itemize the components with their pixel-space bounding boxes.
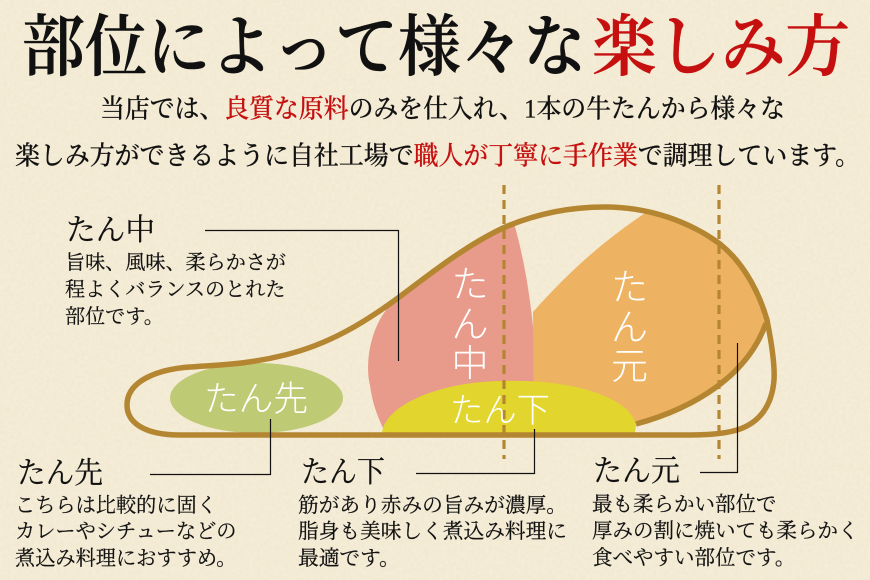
region: tan-saki (green) [170, 363, 343, 433]
callout: tan-shita: 最適です。 [298, 547, 400, 570]
callout: tan-naka: たん中 [66, 214, 155, 247]
label: tan-moto on diagram: た [611, 267, 648, 308]
callout: tan-saki: たん先 [17, 457, 103, 490]
callout: tan-naka: 部位です。 [65, 305, 164, 328]
label: tan-moto on diagram: ん [611, 307, 648, 348]
callout: tan-moto: 食べやすい部位です。 [592, 546, 795, 570]
region: tan-naka (pink) [368, 220, 540, 428]
dashed guide: left [502, 185, 506, 459]
leader line: tan-moto [700, 343, 738, 472]
region: tan-moto (orange) [533, 208, 780, 424]
dashed guide: right [717, 185, 721, 459]
label: tan-naka on diagram: 中 [452, 343, 488, 384]
title: 部位によって様々な [22, 11, 586, 85]
region: tan-shita (yellow) [382, 381, 636, 433]
label: tan-naka on diagram: ん [452, 304, 488, 345]
intro text [15, 94, 860, 170]
leader line: tan-saki [150, 419, 270, 474]
label: tan-shita on diagram: たん下 [450, 392, 550, 430]
callout: tan-moto: 厚みの割に焼いても柔らかく [592, 520, 858, 542]
callout: tan-shita: たん下 [301, 456, 385, 489]
intro text: 当店では、良質な原料のみを仕入れ、1本の牛たんから様々な [100, 94, 785, 124]
callout: tan-naka: 旨味、風味、柔らかさが [65, 251, 286, 274]
callout: tan-naka [65, 214, 286, 328]
callout: tan-shita: 筋があり赤みの旨みが濃厚。 [298, 494, 567, 517]
inner arc: tan-moto boundary [636, 323, 766, 424]
callout: tan-saki: 煮込み料理におすすめ。 [15, 547, 236, 570]
tongue diagram [127, 185, 780, 459]
callout: tan-moto [592, 455, 858, 570]
callout: tan-naka: 程よくバランスのとれた [65, 278, 285, 301]
title: 楽しみ方 [592, 11, 850, 85]
callout: tan-saki [15, 457, 236, 570]
label: tan-moto on diagram: 元 [611, 346, 648, 387]
callout: tan-saki: こちらは比較的に固く [15, 494, 217, 517]
label: tan-naka on diagram: た [452, 264, 488, 305]
tongue outline [127, 207, 774, 435]
callout: tan-moto: 最も柔らかい部位で [592, 493, 776, 516]
label: tan-moto on diagram [611, 267, 648, 387]
callout: tan-shita [298, 456, 567, 570]
label: tan-naka on diagram [452, 264, 488, 384]
callout: tan-shita: 脂身も美味しく煮込み料理に [298, 520, 567, 543]
leader line: tan-shita [416, 429, 534, 474]
leader line: tan-naka [205, 230, 398, 361]
callout: tan-moto: たん元 [593, 455, 680, 488]
callout: tan-saki: カレーやシチューなどの [15, 521, 236, 543]
intro text: 楽しみ方ができるように自社工場で職人が丁寧に手作業で調理しています。 [15, 142, 860, 170]
label: tan-saki on diagram: たん先 [204, 380, 308, 419]
